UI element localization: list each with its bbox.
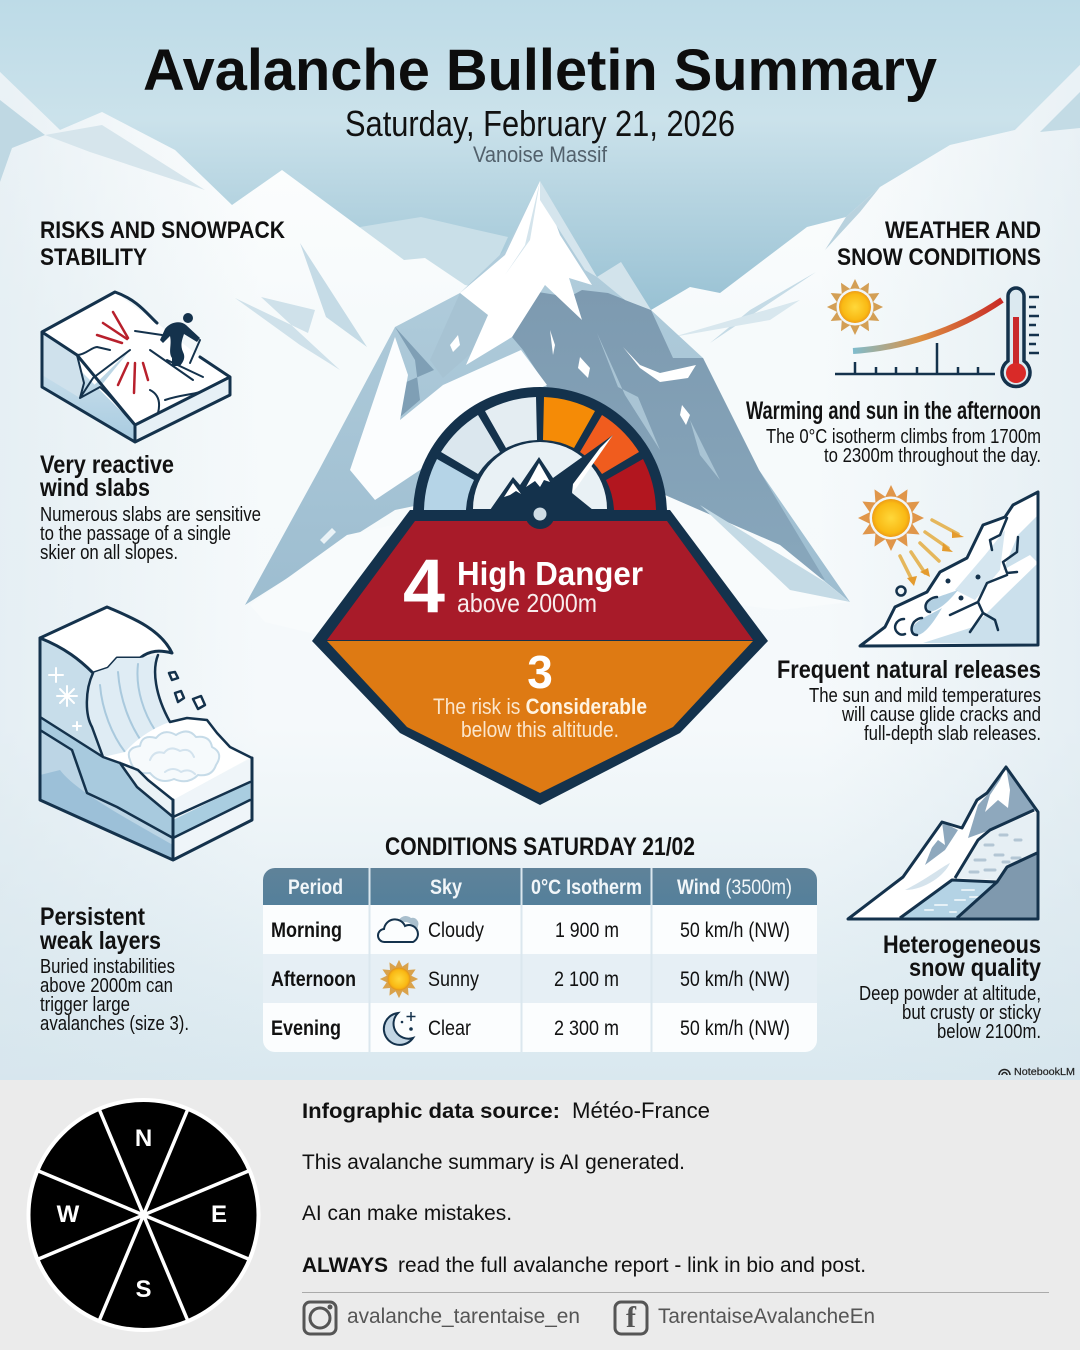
facebook handle: TarentaiseAvalancheEn — [658, 1305, 875, 1328]
panel: considerable danger — [327, 641, 753, 793]
considerable text: The risk is Considerable — [433, 694, 647, 719]
heading: weather and snow conditions — [837, 217, 1041, 271]
altitude label: above 2000m — [457, 588, 597, 618]
text: frequent natural releases: full-depth slab releases. — [864, 723, 1041, 745]
row: evening: 50 km/h (NW) — [680, 1017, 790, 1040]
gauge hub — [473, 442, 607, 509]
text: heterogeneous snow quality: Heterogeneous — [883, 931, 1041, 959]
row: morning: Cloudy — [428, 919, 484, 942]
gauge mountain and needle — [490, 435, 613, 510]
conditions table — [263, 868, 817, 1052]
footer divider — [302, 1292, 1049, 1293]
panel: high danger — [327, 521, 753, 640]
considerable text line two: below this altitude. — [461, 717, 619, 742]
icon: facebook — [615, 1301, 647, 1334]
needle highlight — [572, 435, 613, 493]
row: afternoon: 50 km/h (NW) — [680, 968, 790, 991]
text: heterogeneous snow quality: Deep powder at altitude, — [859, 983, 1041, 1005]
danger level 4: 4 — [403, 544, 445, 629]
text: very reactive wind slabs: wind slabs — [39, 474, 150, 502]
gauge segment: lowest — [424, 459, 474, 510]
text: persistent weak layers: avalanches (size 3). — [40, 1013, 189, 1035]
heading: weather and snow conditions: SNOW CONDITIONS — [837, 244, 1041, 271]
row: evening: 2 300 m — [554, 1017, 619, 1040]
footer text: data source: Infographic data source: — [302, 1099, 560, 1123]
danger badge — [312, 499, 768, 805]
row: evening — [271, 1012, 790, 1045]
text: frequent natural releases: will cause glide cracks and — [841, 704, 1041, 726]
heading: weather and snow conditions: WEATHER AND — [885, 217, 1041, 244]
text: warming and sun in the afternoon: to 2300m throughout the day. — [824, 445, 1041, 467]
icon: persistent weak layer slab — [40, 607, 252, 860]
danger gauge — [413, 387, 667, 514]
heading: risks and snowpack stability: RISKS AND SNOWPACK — [40, 217, 286, 244]
table heading: CONDITIONS SATURDAY 21/02 — [385, 833, 695, 861]
row: afternoon: Afternoon — [271, 968, 356, 991]
icon: sun on slope with natural releases — [858, 485, 1038, 646]
footer text: always read: ALWAYS — [302, 1254, 388, 1277]
compass rose: S — [135, 1276, 152, 1303]
row: afternoon: 2 100 m — [554, 968, 619, 991]
compass rose: E — [211, 1201, 227, 1228]
footer text: data source — [302, 1098, 710, 1123]
text: frequent natural releases: Frequent natural releases — [777, 656, 1041, 684]
gauge segment: orange — [543, 397, 595, 448]
heading: risks and snowpack stability: STABILITY — [40, 244, 147, 271]
footer text: ai generated: This avalanche summary is AI generated. — [302, 1151, 685, 1174]
high danger label: High Danger — [457, 555, 643, 592]
compass rose: W — [57, 1201, 80, 1228]
row: afternoon: Sunny — [428, 968, 479, 991]
table header row — [288, 876, 792, 899]
text: heterogeneous snow quality: below 2100m. — [937, 1021, 1041, 1043]
instagram handle: avalanche_tarentaise_en — [347, 1305, 580, 1328]
text: persistent weak layers: above 2000m can — [40, 975, 173, 997]
text: persistent weak layers: weak layers — [39, 927, 161, 955]
footer text: mistakes: AI can make mistakes. — [302, 1202, 512, 1225]
gauge segment: low — [441, 415, 500, 474]
icon: sun, warming curve and thermometer — [827, 279, 1039, 386]
gauge pivot dot — [534, 508, 546, 520]
compass rose: N — [135, 1125, 152, 1152]
compass rose — [28, 1100, 258, 1330]
notebooklm credit: NotebookLM — [1014, 1066, 1075, 1078]
row: morning: 50 km/h (NW) — [680, 919, 790, 942]
text: very reactive wind slabs: skier on all slopes. — [40, 542, 178, 564]
icon: mountain with heterogeneous snow bands — [848, 767, 1038, 919]
heading: risks and snowpack stability — [40, 217, 286, 271]
danger level 3: 3 — [527, 646, 553, 698]
table header row: Period — [288, 876, 343, 899]
text: heterogeneous snow quality: snow quality — [909, 954, 1041, 982]
title: Avalanche Bulletin Summary — [143, 38, 937, 103]
text: frequent natural releases: The sun and mild temperatures — [809, 685, 1041, 707]
text: persistent weak layers: Persistent — [40, 903, 146, 931]
text: frequent natural releases — [777, 656, 1041, 745]
text: heterogeneous snow quality — [859, 931, 1041, 1043]
icon: wind slab with skier — [42, 292, 230, 442]
text: very reactive wind slabs: to the passage of a single — [40, 523, 231, 545]
text: very reactive wind slabs — [39, 451, 261, 564]
text: persistent weak layers: Buried instabilities — [40, 956, 175, 978]
footer text: data source: Météo-France — [572, 1098, 710, 1123]
date: Saturday, February 21, 2026 — [345, 103, 735, 144]
row: evening: Clear — [428, 1017, 471, 1040]
text: heterogeneous snow quality: but crusty or sticky — [902, 1002, 1041, 1024]
row: morning: 1 900 m — [555, 919, 619, 942]
icon: facebook: f — [626, 1301, 637, 1334]
text: persistent weak layers: trigger large — [40, 994, 130, 1016]
row: evening: Evening — [271, 1017, 341, 1040]
footer panel — [0, 1080, 1080, 1350]
gauge segment: deep orange — [580, 415, 639, 474]
table header row: Sky — [430, 876, 462, 899]
footer text: always read: read the full avalanche report - link in bio and post. — [398, 1254, 866, 1277]
location: Vanoise Massif — [473, 142, 608, 167]
table header row: 0°C Isotherm — [531, 876, 642, 899]
table header row: Wind (3500m) — [677, 876, 792, 899]
text: warming and sun in the afternoon — [746, 397, 1041, 467]
row: morning — [271, 916, 790, 942]
icon: instagram — [304, 1302, 336, 1334]
gauge segment: red — [606, 459, 656, 510]
gauge peak snow — [526, 463, 550, 487]
gauge pivot — [525, 499, 555, 529]
row: afternoon — [271, 960, 790, 998]
gauge segment: moderate — [485, 397, 537, 448]
text: persistent weak layers — [39, 903, 189, 1035]
background: sky and snow mountains — [0, 0, 1080, 1080]
text: very reactive wind slabs: Numerous slabs are sensitive — [40, 504, 261, 526]
row: morning: Morning — [271, 919, 342, 942]
gauge mountain snow — [504, 483, 521, 497]
text: very reactive wind slabs: Very reactive — [40, 451, 174, 479]
